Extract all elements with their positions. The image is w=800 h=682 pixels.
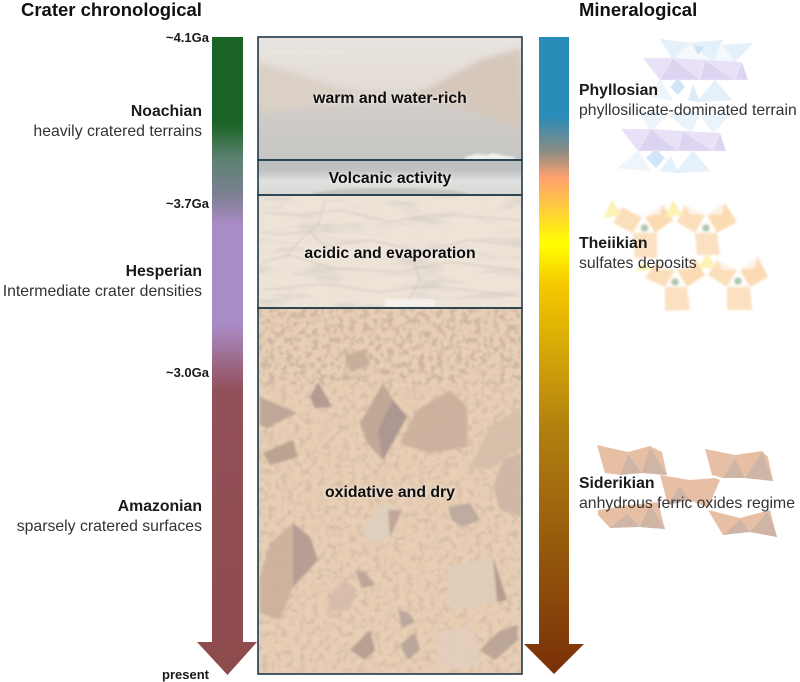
label: 3.7 Ga: ~3.7Ga — [166, 196, 209, 211]
label: 4.1 Ga: ~4.1Ga — [166, 30, 209, 45]
text block: Theiikian — [579, 235, 697, 272]
label: volcanic activity: Volcanic activity — [329, 170, 451, 187]
label: oxidative and dry: oxidative and dry — [325, 484, 455, 501]
arrow: crater chronology timeline — [197, 37, 257, 675]
label: acidic and evaporation: acidic and evaporation — [304, 245, 476, 262]
text block: Siderikian — [579, 475, 795, 512]
icon: ferric oxide crystal structure — [597, 445, 777, 537]
scene: warm and water-rich lake: BILLIONS OF YEARS AGO — [270, 55, 348, 60]
arrow: mineralogical timeline — [524, 37, 584, 674]
scene: warm and water-rich lake — [258, 37, 522, 160]
text block: Noachian — [33, 103, 202, 140]
text block: Amazonian: Amazonian — [118, 498, 202, 515]
text block: Theiikian: sulfates deposits — [579, 255, 697, 272]
text block: Noachian: Noachian — [131, 103, 202, 120]
text block: Siderikian: Siderikian — [579, 475, 655, 492]
scene: warm and water-rich lake: NERETVA VALLIS, MARS — [270, 49, 345, 54]
text block: Theiikian: Theiikian — [579, 235, 647, 252]
text block: Hesperian: Hesperian — [126, 263, 202, 280]
scene: volcanic activity band — [258, 160, 522, 202]
icon: sulfate crystal structure — [603, 200, 768, 311]
text block: Hesperian — [3, 263, 202, 300]
label: 3.0 Ga: ~3.0Ga — [166, 365, 209, 380]
scene: rocky dry terrain — [258, 308, 522, 674]
text block: Phyllosian: phyllosilicate-dominated terrain — [579, 102, 797, 119]
text block: Siderikian: anhydrous ferric oxides regime — [579, 495, 795, 512]
text block: Hesperian: Intermediate crater densities — [3, 283, 202, 300]
text block: Phyllosian: Phyllosian — [579, 82, 658, 99]
panel frames — [258, 37, 522, 674]
scene: cracked evaporite plain — [258, 195, 522, 308]
label: present: present — [162, 667, 209, 682]
text block: Amazonian: sparsely cratered surfaces — [17, 518, 202, 535]
text block: Noachian: heavily cratered terrains — [33, 123, 202, 140]
text block: Amazonian — [17, 498, 202, 535]
panel: environment scene column — [197, 36, 777, 675]
label: warm and water-rich: warm and water-rich — [313, 90, 467, 107]
icon: phyllosilicate crystal structure — [618, 39, 753, 173]
text block: Phyllosian — [579, 82, 797, 119]
